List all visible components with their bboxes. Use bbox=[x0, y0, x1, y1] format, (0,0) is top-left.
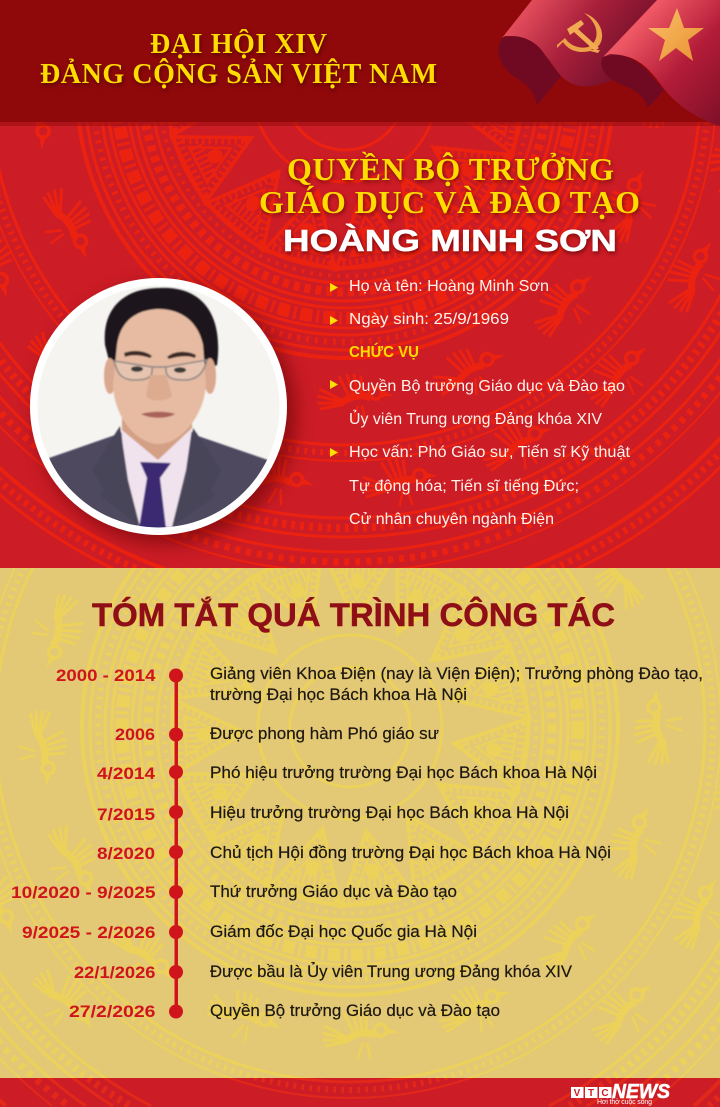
timeline: career milestones: Hiệu trưởng trường Đại học Bách khoa Hà Nội bbox=[210, 803, 569, 822]
heading: career summary: TÓM TẮT QUÁ TRÌNH CÔNG TÁC bbox=[92, 597, 615, 633]
heading: event title: ĐẠI HỘI XIV bbox=[150, 29, 327, 60]
timeline: career milestones: 9/2025 - 2/2026 bbox=[22, 923, 156, 942]
icon: national flag with gold star bbox=[601, 0, 720, 126]
logo: VTC News: Hơi thở cuộc sống bbox=[597, 1097, 652, 1106]
info list: personal details bbox=[330, 278, 631, 528]
panel: red profile section bbox=[0, 122, 720, 568]
logo: VTC News: C bbox=[601, 1088, 609, 1099]
bullet: birth date: Ngày sinh: 25/9/1969 bbox=[349, 311, 509, 328]
timeline: career milestones: 22/1/2026 bbox=[74, 963, 156, 982]
logo: VTC News: NEWS bbox=[612, 1081, 671, 1103]
timeline: career milestones: 4/2014 bbox=[97, 764, 156, 783]
bullet: education: Tự động hóa; Tiến sĩ tiếng Đức; bbox=[349, 478, 579, 495]
heading: event title bbox=[40, 29, 437, 90]
bullet: education bbox=[330, 444, 631, 528]
bullet: education: Học vấn: Phó Giáo sư, Tiến sĩ Kỹ thuật bbox=[349, 444, 631, 461]
logo: VTC News: V bbox=[574, 1088, 581, 1099]
timeline: career milestones: Giảng viên Khoa Điện (nay là Viện Điện); Trưởng phòng Đào tạo, bbox=[210, 664, 703, 683]
timeline: career milestones: Được phong hàm Phó giáo sư bbox=[210, 724, 439, 743]
timeline: career milestones: trường Đại học Bách khoa Hà Nội bbox=[210, 685, 467, 704]
heading: position title: QUYỀN BỘ TRƯỞNG bbox=[287, 151, 614, 187]
timeline: career milestones: Được bầu là Ủy viên Trung ương Đảng khóa XIV bbox=[210, 962, 573, 981]
timeline: career milestones: Quyền Bộ trưởng Giáo dục và Đào tạo bbox=[210, 1001, 500, 1020]
heading: event title: ĐẢNG CỘNG SẢN VIỆT NAM bbox=[40, 59, 437, 90]
bullet: positions bbox=[330, 378, 625, 428]
label: position subheading: CHỨC VỤ bbox=[349, 342, 419, 361]
heading: position title bbox=[259, 151, 640, 220]
portrait photo bbox=[30, 278, 296, 544]
timeline: career milestones: 10/2020 - 9/2025 bbox=[11, 883, 156, 902]
timeline: career milestones bbox=[11, 664, 703, 1021]
timeline: career milestones: Phó hiệu trưởng trường Đại học Bách khoa Hà Nội bbox=[210, 763, 597, 782]
heading: person name: HOÀNG MINH SƠN bbox=[283, 223, 617, 258]
timeline: career milestones: 27/2/2026 bbox=[69, 1002, 156, 1021]
logo: VTC News: T bbox=[588, 1088, 594, 1099]
timeline: career milestones: 7/2015 bbox=[97, 805, 155, 824]
timeline: career milestones: Chủ tịch Hội đồng trường Đại học Bách khoa Hà Nội bbox=[210, 843, 611, 862]
panel: dark red header band bbox=[0, 0, 720, 122]
timeline: career milestones: 2000 - 2014 bbox=[56, 666, 156, 685]
bullet: positions: Quyền Bộ trưởng Giáo dục và Đào tạo bbox=[349, 378, 625, 395]
bullet: education: Cử nhân chuyên ngành Điện bbox=[349, 511, 554, 528]
icon: party flag with hammer and sickle bbox=[498, 0, 657, 105]
timeline: career milestones: 8/2020 bbox=[97, 844, 155, 863]
timeline: career milestones: Giám đốc Đại học Quốc gia Hà Nội bbox=[210, 922, 477, 941]
logo: VTC News bbox=[571, 1081, 671, 1106]
bullet: positions: Ủy viên Trung ương Đảng khóa XIV bbox=[349, 409, 602, 428]
timeline: career milestones: 2006 bbox=[115, 725, 155, 744]
bullet: name: Họ và tên: Hoàng Minh Sơn bbox=[349, 278, 549, 295]
heading: position title: GIÁO DỤC VÀ ĐÀO TẠO bbox=[259, 184, 640, 220]
timeline: career milestones: Thứ trưởng Giáo dục và Đào tạo bbox=[210, 882, 457, 901]
